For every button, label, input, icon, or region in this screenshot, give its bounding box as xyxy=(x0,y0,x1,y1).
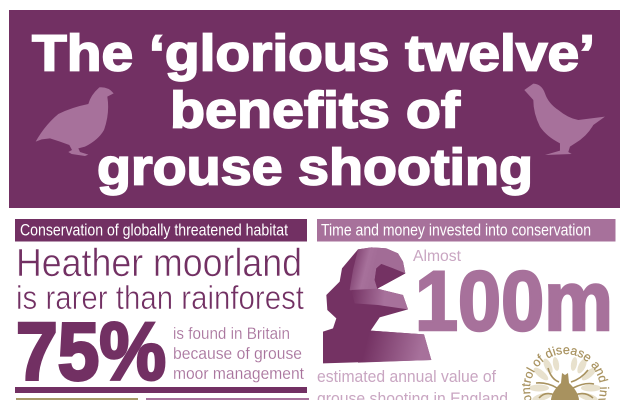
text: found in Britain xyxy=(173,325,304,383)
panel: habitat conservation xyxy=(15,219,307,398)
title: grouse shooting xyxy=(97,138,533,196)
panel: lower left olive box xyxy=(16,398,138,400)
heading: habitat: Conservation of globally threatened habitat xyxy=(20,220,288,240)
icon: disease control badge xyxy=(522,346,610,400)
title: benefits of xyxy=(170,82,461,138)
text: heather moorland headline: Heather moorland xyxy=(16,242,302,285)
wheat leaves xyxy=(529,357,601,400)
panel: conservation investment xyxy=(317,219,616,400)
text: estimated annual value xyxy=(317,367,508,400)
panel: title banner xyxy=(9,10,620,208)
icon: left grouse xyxy=(36,87,114,156)
title: The ‘glorious twelve’ xyxy=(32,24,595,82)
text: found in Britain: is found in Britain xyxy=(173,325,290,343)
stat: 75%: 75% xyxy=(16,306,166,398)
title xyxy=(32,24,595,196)
text: heather moorland headline xyxy=(16,242,304,316)
divider bar xyxy=(15,387,307,393)
icon: 3D pound sign xyxy=(323,247,431,363)
text: heather moorland headline: is rarer than rainforest xyxy=(16,279,304,316)
text: almost: Almost xyxy=(413,248,462,265)
stat: 100m: 100m xyxy=(415,254,613,348)
panel: lower middle purple box xyxy=(146,398,309,400)
louse xyxy=(536,368,594,400)
icon: right grouse xyxy=(524,84,605,155)
text: found in Britain: because of grouse xyxy=(173,345,302,363)
text: found in Britain: moor management xyxy=(173,365,304,383)
text: estimated annual value: estimated annual value of xyxy=(317,367,496,386)
